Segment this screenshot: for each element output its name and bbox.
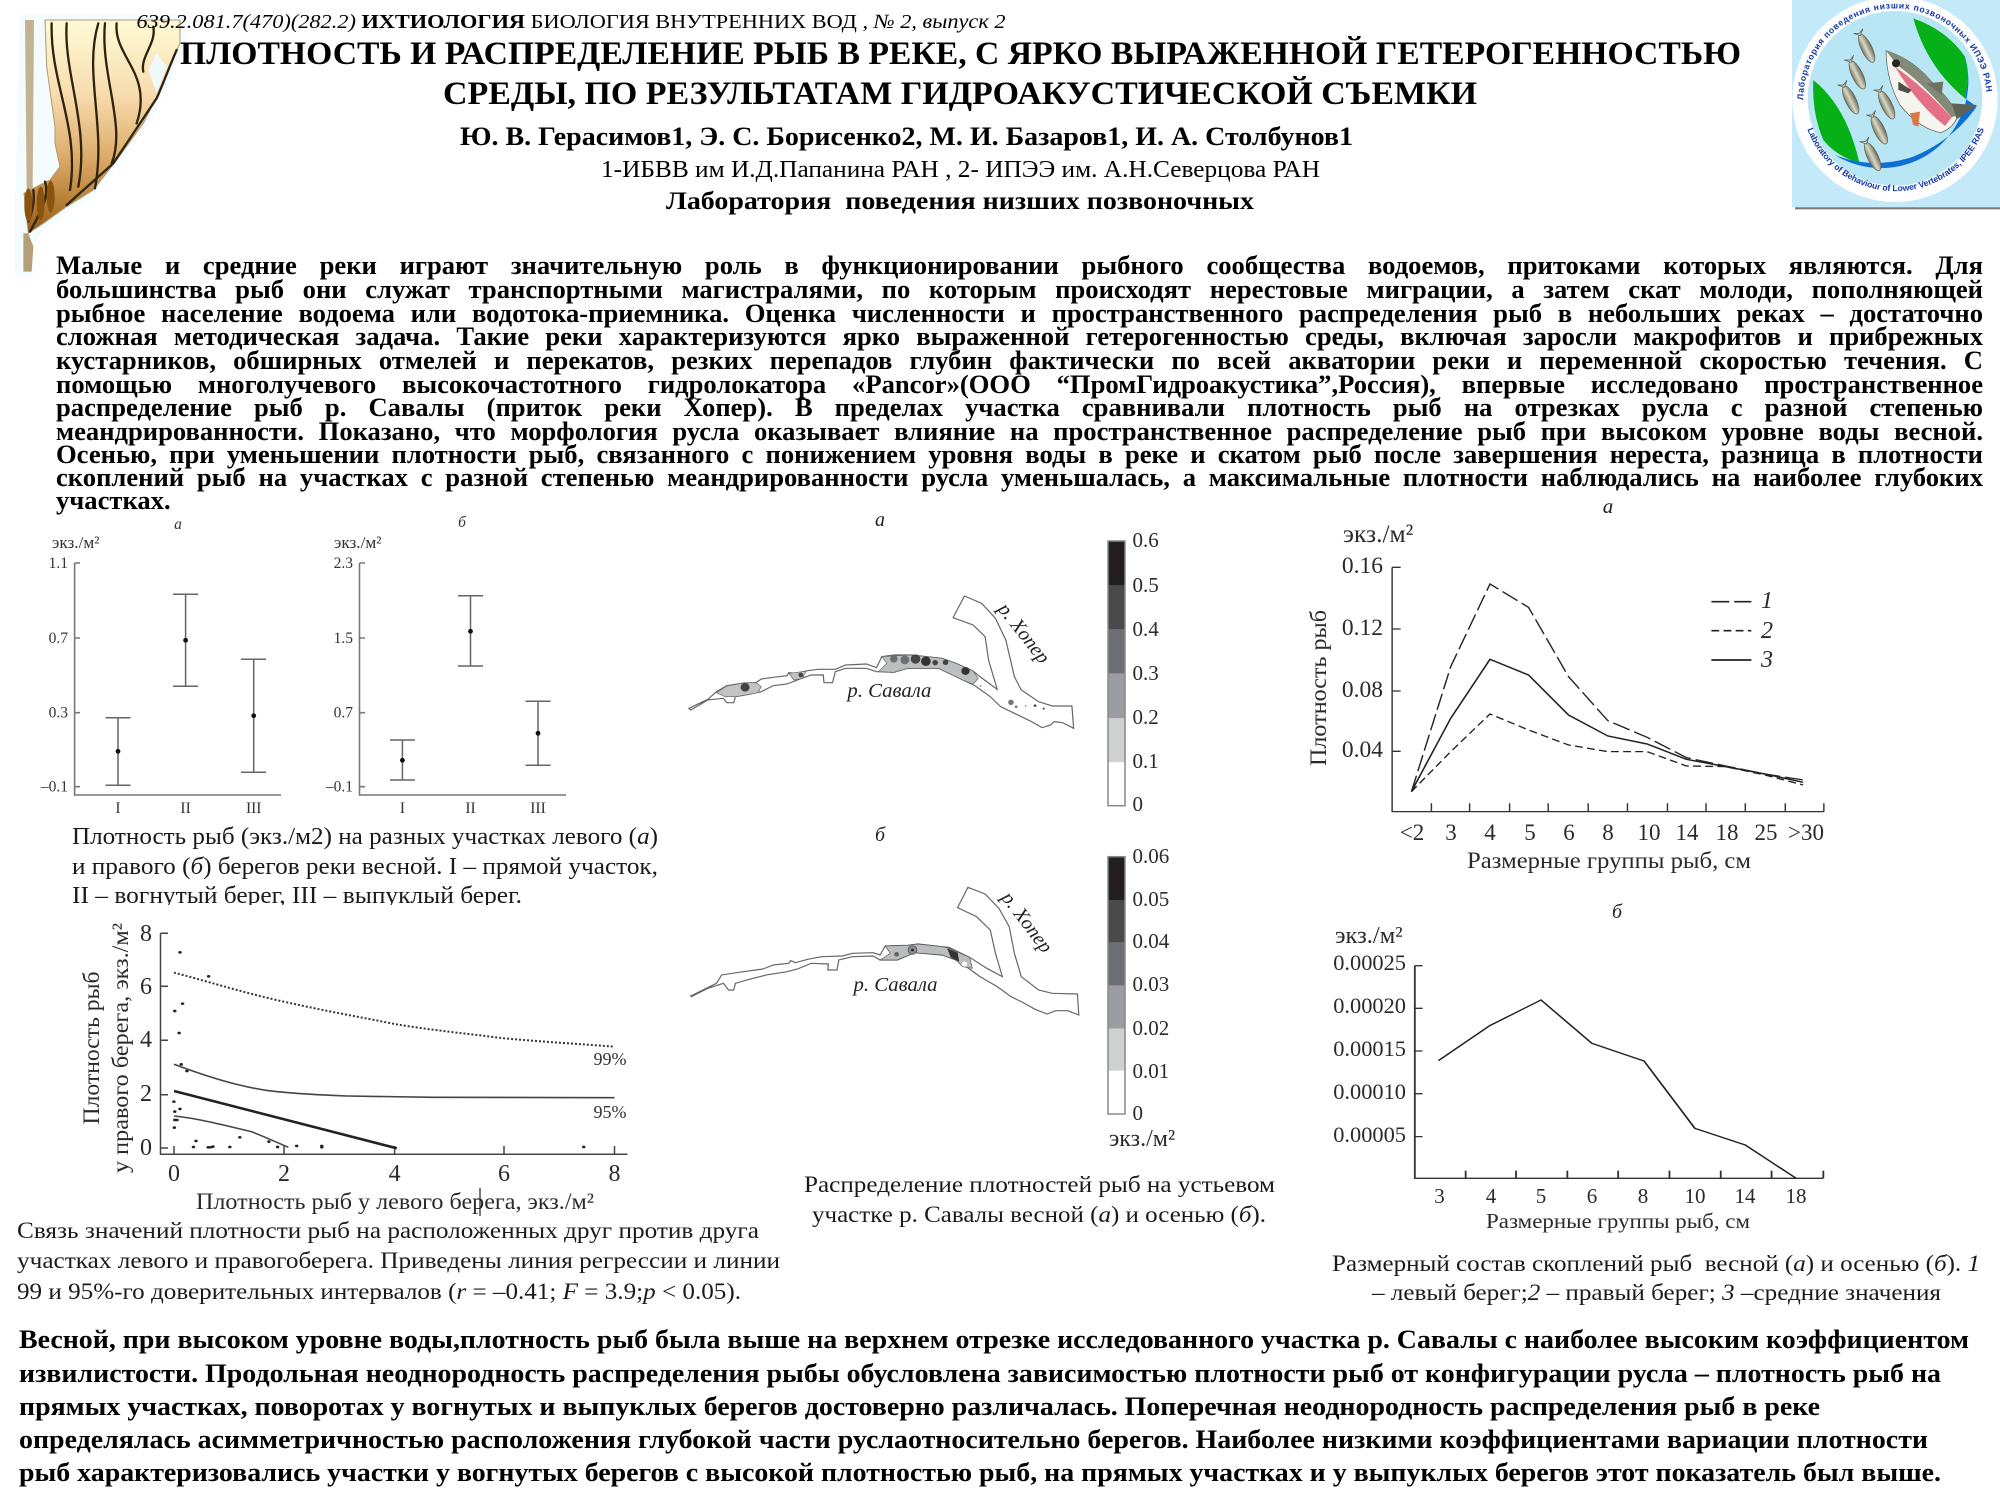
legend: spring colour scale: 0.2 [1132, 705, 1159, 729]
chart: density by reach, right bank (б): 0.7 [334, 704, 353, 722]
chart: density by reach, left bank (а) [40, 516, 281, 817]
legend: autumn colour scale: 0.03 [1132, 972, 1169, 996]
legend: autumn colour scale: 0.02 [1132, 1016, 1169, 1040]
chart: density by reach, left bank (а): 0.3 [49, 704, 68, 722]
chart: scatter of left vs right bank density: 6 [498, 1161, 510, 1187]
caption: scatter: 99 и 95%-го доверительных интервалов ( r = –0.41; F = 3.9;p < 0.05). [17, 1279, 741, 1305]
header: journal reference: 639.2.081.7(470)(282.2) ИХТИОЛОГИЯ БИОЛОГИЯ ВНУТРЕННИХ ВОД , № 2, выпуск 2 [136, 11, 1006, 33]
legend: autumn colour scale: 0.01 [1132, 1059, 1169, 1083]
map: river density in autumn (б): р. Савала [851, 974, 938, 996]
chart: scatter of left vs right bank density [79, 921, 628, 1216]
caption: river maps: участке р. Савалы весной ( а) и осенью ( б). [812, 1202, 1266, 1228]
intro paragraph: распределение рыб р. Савалы (приток реки Хопер). В пределах участка сравнивали плотность рыб на отрезках русла с разной степенью [56, 392, 1983, 422]
line chart: size groups in spring (а): экз./м² [1343, 519, 1414, 548]
intro paragraph: Осенью, при уменьшении плотности рыб, связанного с понижением уровня воды в реке и скатом рыб после завершения нереста, разница в плотности [56, 439, 1983, 469]
conclusions text: извилистости. Продольная неоднородность распределения рыбы обусловлена зависимостью плотности рыб от конфигурации русла – плотность рыб на [19, 1358, 1941, 1388]
caption: density by reach: II – вогнутый берег, III – выпуклый берег. [72, 883, 522, 909]
line chart: size groups in autumn (б): 10 [1684, 1184, 1706, 1208]
chart: density by reach, right bank (б): 2.3 [334, 555, 353, 572]
chart: density by reach, right bank (б): экз./м² [334, 533, 381, 552]
map: river density in spring (а) [689, 509, 1074, 728]
chart: density by reach, right bank (б): –0.1 [325, 778, 353, 796]
caption: size groups [1332, 1251, 1980, 1306]
caption: density by reach: Плотность рыб (экз./м2) на разных участках левого ( а) [72, 824, 658, 850]
line chart: size groups in spring (а): 3 [1760, 647, 1773, 673]
chart: density by reach, left bank (а): III [246, 800, 261, 817]
line chart: size groups in spring (а): 8 [1602, 820, 1614, 845]
caption: density by reach [72, 824, 658, 909]
line chart: size groups in spring (а): <2 [1400, 820, 1424, 845]
title: СРЕДЫ, ПО РЕЗУЛЬТАТАМ ГИДРОАКУСТИЧЕСКОЙ СЪЕМКИ [443, 75, 1477, 112]
authors: Ю. В. Герасимов1, Э. С. Борисенко2, М. И. Базаров1, И. А. Столбунов1 [460, 122, 1353, 151]
title: ПЛОТНОСТЬ И РАСПРЕДЕЛЕНИЕ РЫБ В РЕКЕ, С ЯРКО ВЫРАЖЕННОЙ ГЕТЕРОГЕННОСТЬЮ [180, 35, 1741, 72]
line chart: size groups in spring (а): 4 [1484, 820, 1496, 845]
caption: scatter: Связь значений плотности рыб на расположенных друг против друга [17, 1218, 760, 1244]
legend: spring colour scale: 0 [1132, 792, 1143, 816]
chart: density by reach, left bank (а): 1.1 [49, 555, 68, 572]
legend: spring colour scale: 0.4 [1132, 617, 1159, 641]
legend: autumn colour scale: 0.06 [1132, 844, 1169, 868]
caption: river maps: Распределение плотностей рыб на устьевом [804, 1172, 1275, 1198]
line chart: size groups in autumn (б): 0.00015 [1333, 1036, 1406, 1061]
line chart: size groups in spring (а): 14 [1676, 820, 1699, 845]
chart: scatter of left vs right bank density: 0 [168, 1161, 180, 1187]
laboratory name: Лаборатория поведения низших позвоночных [666, 188, 1255, 215]
conclusions text: рыб характеризовались участки у вогнутых берегов с высокой плотностью рыб, на прямых участках и у выпуклых берегов этот показатель был выше. [19, 1457, 1941, 1487]
line chart: size groups in spring (а): Плотность рыб [1306, 610, 1331, 766]
legend: autumn colour scale [1108, 844, 1175, 1152]
conclusions text [19, 1324, 1969, 1487]
chart: scatter of left vs right bank density: 95% [594, 1102, 626, 1122]
chart: density by reach, right bank (б) [325, 514, 566, 817]
line chart: size groups in spring (а): Размерные группы рыб, см [1467, 848, 1751, 873]
intro paragraph: большинства рыб они служат транспортными магистралями, по которым происходят нерестовые миграции, а затем скат молоди, пополняющей [56, 274, 1983, 304]
caption: scatter: участках левого и правогоберега. Приведены линия регрессии и линии [17, 1248, 780, 1274]
chart: density by reach, right bank (б): III [530, 800, 546, 817]
conclusions text: прямых участках, поворотах у вогнутых и выпуклых берегов достоверно различалась. Поперечная неоднородность распределения рыб в реке [19, 1391, 1820, 1421]
legend: spring colour scale: 0.3 [1132, 661, 1159, 685]
intro paragraph: сложная методическая задача. Такие реки характеризуются ярко выраженной гетерогенностью среды, включая заросли макрофитов и прибрежных [56, 321, 1983, 351]
line chart: size groups in spring (а): 5 [1524, 820, 1536, 845]
chart: density by reach, right bank (б): II [465, 800, 476, 817]
chart: scatter of left vs right bank density: 2 [140, 1081, 152, 1107]
intro paragraph: рыбное население водоема или водотока-приемника. Оценка численности и пространственного распределения рыб в небольших реках – достаточно [56, 298, 1983, 328]
chart: density by reach, right bank (б): 1.5 [334, 630, 353, 647]
line chart: size groups in spring (а): а [1603, 494, 1613, 518]
intro paragraph [56, 250, 1983, 515]
line chart: size groups in autumn (б): б [1612, 901, 1623, 923]
legend: autumn colour scale: 0.04 [1132, 929, 1170, 953]
conclusions text: Весной, при высоком уровне воды,плотность рыб была выше на верхнем отрезке исследованного участка р. Савалы с наиболее высоким коэффициентом [19, 1324, 1969, 1354]
line chart: size groups in spring (а): 1 [1761, 588, 1773, 614]
legend: autumn colour scale: 0.05 [1132, 887, 1169, 911]
legend: spring colour scale: 0.1 [1132, 749, 1159, 773]
line chart: size groups in autumn (б): 0.00005 [1333, 1122, 1406, 1147]
line chart: size groups in autumn (б): 6 [1587, 1184, 1597, 1208]
line chart: size groups in spring (а): 18 [1716, 820, 1738, 845]
chart: scatter of left vs right bank density: Плотность рыб [79, 972, 104, 1124]
line chart: size groups in spring (а): >30 [1788, 820, 1824, 845]
line chart: size groups in spring (а) [1306, 494, 1824, 873]
chart: density by reach, left bank (а): –0.1 [40, 778, 68, 796]
icon: laboratory logo [1792, 0, 2000, 210]
legend: autumn colour scale: экз./м² [1109, 1126, 1175, 1152]
intro paragraph: кустарников, обширных отмелей и перекатов, резких перепадов глубин фактически по всей акватории реки и переменной скоростью течения. С [56, 345, 1983, 375]
line chart: size groups in autumn (б): Размерные группы рыб, см [1486, 1209, 1750, 1233]
line chart: size groups in autumn (б): 4 [1486, 1184, 1497, 1208]
caption: size groups: – левый берег; 2 – правый берег; 3 –средние значения [1371, 1280, 1941, 1306]
line chart: size groups in autumn (б): 18 [1786, 1184, 1806, 1208]
intro paragraph: меандрированности. Показано, что морфология русла оказывает влияние на пространственное распределение рыб при высоком уровне воды весной. [56, 416, 1983, 446]
intro paragraph: помощью многолучевого высокочастотного гидролокатора «Pancor»(ООО “ПромГидроакустика”,Россия), впервые исследовано пространственное [56, 369, 1983, 399]
map: river density in autumn (б): р. Хопер [996, 886, 1057, 957]
conclusions text: определялась асимметричностью расположения глубокой части руслаотносительно берегов. Наиболее низкими коэффициентами вариации плотности [19, 1424, 1928, 1454]
line chart: size groups in autumn (б) [1333, 901, 1823, 1233]
chart: scatter of left vs right bank density: Плотность рыб у левого берега, экз./м² [196, 1189, 594, 1214]
caption: river maps [804, 1172, 1275, 1228]
title [180, 35, 1741, 112]
chart: density by reach, left bank (а): II [180, 800, 191, 817]
chart: scatter of left vs right bank density: 0 [140, 1135, 152, 1161]
icon: laboratory logo: Laboratory of Behaviour of Lower Vertebrates, IPEE RAS [1808, 128, 1984, 192]
line chart: size groups in spring (а): 0.04 [1342, 737, 1383, 763]
chart: scatter of left vs right bank density: 4 [140, 1027, 152, 1053]
icon: laboratory logo: Лаборатория поведения низших позвоночных ИПЭЭ РАН [1797, 4, 1992, 100]
line chart: size groups in spring (а): 25 [1754, 820, 1778, 845]
chart: density by reach, left bank (а): экз./м² [52, 533, 99, 552]
chart: density by reach, left bank (а): 0.7 [49, 630, 68, 647]
line chart: size groups in autumn (б): 5 [1536, 1184, 1546, 1208]
chart: density by reach, right bank (б): I [400, 800, 405, 817]
affiliations: 1-ИБВВ им И.Д.Папанина РАН , 2- ИПЭЭ им. А.Н.Северцова РАН [601, 157, 1320, 183]
chart: scatter of left vs right bank density: 4 [389, 1161, 401, 1187]
map: river density in spring (а): а [875, 509, 885, 531]
legend: autumn colour scale: 0 [1132, 1101, 1143, 1125]
chart: scatter of left vs right bank density: 6 [140, 974, 152, 1000]
line chart: size groups in autumn (б): 0.00010 [1333, 1079, 1406, 1104]
chart: scatter of left vs right bank density: 8 [608, 1161, 620, 1187]
line chart: size groups in spring (а): 10 [1638, 820, 1660, 845]
icon: decorative curtain [15, 15, 185, 277]
legend: spring colour scale [1108, 528, 1159, 816]
line chart: size groups in spring (а): 3 [1445, 820, 1457, 845]
legend: spring colour scale: 0.6 [1132, 528, 1159, 552]
line chart: size groups in autumn (б): 8 [1638, 1184, 1648, 1208]
line chart: size groups in spring (а): 6 [1563, 820, 1575, 845]
line chart: size groups in spring (а): 0.12 [1342, 615, 1383, 641]
map: river density in autumn (б) [691, 824, 1079, 1015]
map: river density in spring (а): р. Савала [845, 680, 931, 702]
legend: spring colour scale: 0.5 [1132, 573, 1159, 597]
line chart: size groups in spring (а): 0.08 [1342, 677, 1383, 703]
intro paragraph: участках. [56, 485, 171, 515]
chart: scatter of left vs right bank density: у правого берега, экз./м² [108, 923, 133, 1173]
line chart: size groups in autumn (б): 0.00020 [1333, 993, 1406, 1018]
line chart: size groups in autumn (б): экз./м² [1335, 922, 1403, 949]
chart: density by reach, left bank (а): а [174, 516, 182, 533]
caption: size groups: Размерный состав скоплений рыб весной ( а) и осенью ( б). 1 [1332, 1251, 1980, 1277]
caption: density by reach: и правого (б) берегов реки весной. I – прямой участок, [72, 854, 658, 880]
chart: scatter of left vs right bank density: 99% [594, 1049, 626, 1069]
intro paragraph: Малые и средние реки играют значительную роль в функционировании рыбного сообщества водоемов, притоками которых являются. Для [56, 250, 1983, 280]
chart: scatter of left vs right bank density: 2 [278, 1161, 290, 1187]
chart: scatter of left vs right bank density: 8 [140, 921, 152, 947]
line chart: size groups in autumn (б): 14 [1734, 1184, 1756, 1208]
line chart: size groups in spring (а): 0.16 [1342, 553, 1383, 579]
map: river density in autumn (б): б [875, 824, 886, 846]
intro paragraph: скоплений рыб на участках с разной степенью меандрированности русла уменьшалась, а максимальные плотности наблюдались на наиболее глубоких [56, 462, 1983, 492]
caption: scatter [17, 1218, 780, 1305]
line chart: size groups in autumn (б): 0.00025 [1333, 950, 1406, 975]
chart: density by reach, left bank (а): I [115, 800, 121, 817]
line chart: size groups in autumn (б): 3 [1434, 1184, 1445, 1208]
chart: density by reach, right bank (б): б [458, 514, 467, 531]
map: river density in spring (а): р. Хопер [992, 597, 1054, 668]
line chart: size groups in spring (а): 2 [1761, 618, 1773, 644]
